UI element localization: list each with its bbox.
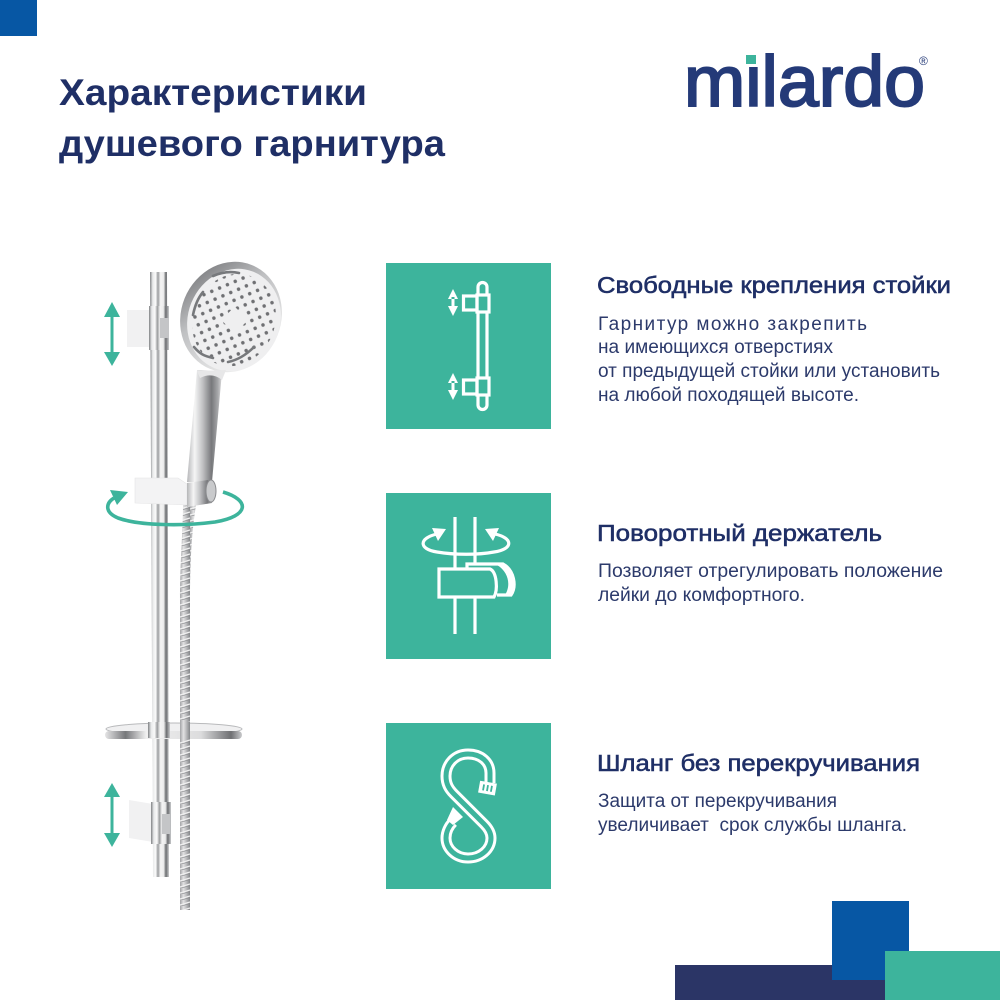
- text block: swivel holder: [598, 561, 943, 606]
- panel: swivel holder icon: [386, 493, 551, 659]
- title: [59, 72, 445, 164]
- text block: free rail mounts: на имеющихся отверстиях: [598, 337, 833, 358]
- corner accent: top left square: [0, 0, 37, 36]
- panel: free rail mounts icon: [386, 263, 551, 429]
- soap tray: [105, 722, 242, 739]
- product: shower set: [104, 246, 298, 910]
- holder: [439, 564, 514, 597]
- heading: swivel holder: Поворотный держатель: [597, 520, 882, 546]
- small arrow lower: [448, 373, 458, 400]
- text block: anti-twist hose: Защита от перекручивания: [598, 791, 837, 812]
- text block: free rail mounts: [598, 314, 940, 406]
- logo: milardo: ®: [919, 54, 928, 68]
- hose: [180, 505, 196, 910]
- swivel holder: [135, 478, 216, 507]
- title: душевого гарнитура: [59, 123, 445, 164]
- corner accent: bottom right blocks: [675, 901, 1000, 1000]
- hose end fitting: [478, 781, 497, 795]
- S hook hose: [446, 754, 491, 858]
- lower clamp: [464, 378, 489, 395]
- small arrow upper: [448, 289, 458, 316]
- text block: swivel holder: лейки до комфортного.: [598, 585, 805, 606]
- text block: free rail mounts: от предыдущей стойки или установить: [598, 361, 940, 382]
- text block: free rail mounts: на любой походящей высоте.: [598, 385, 859, 406]
- swivel arrow: [423, 534, 509, 554]
- text block: free rail mounts: Гарнитур можно закрепить: [598, 314, 867, 335]
- heading: anti-twist hose: Шланг без перекручивания: [597, 750, 920, 776]
- sliding rail: [150, 272, 169, 877]
- text block: anti-twist hose: увеличивает срок службы шланга.: [598, 815, 907, 836]
- text block: swivel holder: Позволяет отрегулировать положение: [598, 561, 943, 582]
- rotation arrow: [108, 490, 242, 525]
- logo: milardo: milardo: [684, 43, 925, 122]
- shower head: [164, 246, 298, 388]
- text block: anti-twist hose: [598, 791, 907, 836]
- shower handle: [187, 370, 222, 482]
- heading: free rail mounts: Свободные крепления стойки: [597, 272, 951, 298]
- panel: anti-twist hose icon: [386, 723, 551, 889]
- lower rail bracket: [129, 800, 171, 844]
- hose start fitting: [447, 807, 463, 825]
- upper rail bracket: [127, 306, 169, 350]
- rail outline: [478, 282, 487, 410]
- arrow: top vertical: [104, 302, 120, 366]
- arrow: bottom vertical: [104, 783, 120, 847]
- upper clamp: [464, 295, 489, 312]
- title: Характеристики: [59, 72, 367, 113]
